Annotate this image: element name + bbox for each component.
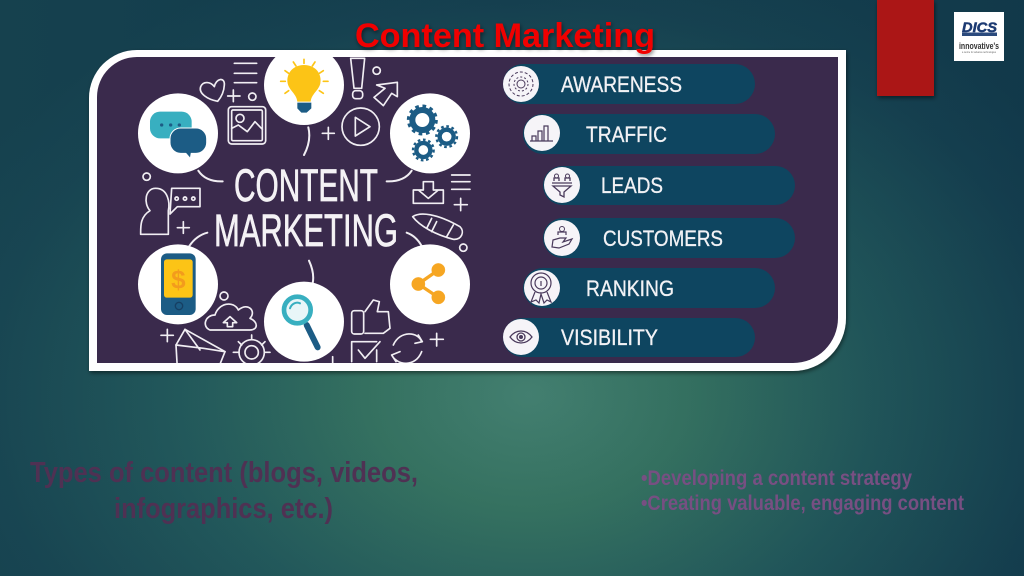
illustration heading: CONTENT MARKETING [214,160,398,256]
panel: content marketing image [89,45,846,371]
heart [200,80,224,101]
download tray [413,182,443,203]
thumbs up [352,311,364,334]
item: leads [543,166,795,205]
check box and refresh [352,342,377,362]
connector lines [189,127,422,283]
arrow [374,82,397,106]
bullet list: content strategy [641,467,964,515]
item: ranking [523,268,775,308]
icon: chat bubbles [150,112,207,157]
item: leads: LEADS [601,173,663,198]
pencil [413,214,462,239]
logo: DICS and innovative's: innovative's [959,41,999,51]
text block: types of content: infographics, etc.) [114,493,333,525]
item: traffic: TRAFFIC [586,122,667,147]
image frame [228,107,266,144]
item: traffic [523,114,775,154]
item: ranking: RANKING [586,276,674,301]
line icons [141,58,470,368]
icon: phone with dollar: $ [171,264,186,294]
plus envelope gear [161,329,173,342]
bullet list: content strategy: •Developing a content strategy [641,467,912,490]
bullet list: content strategy: •Creating valuable, engaging content [641,492,964,515]
white circles [138,45,470,362]
exclamation [351,58,365,88]
icon: gears [408,106,457,160]
illustration heading: CONTENT MARKETING: CONTENT [234,160,378,211]
list: marketing goals [503,64,795,357]
item: customers: CUSTOMERS [603,226,723,251]
red accent tab [877,0,934,96]
person with chat [143,173,150,180]
text block: types of content [30,457,418,525]
item: awareness: AWARENESS [561,72,682,97]
logo: DICS and innovative's [954,12,1004,61]
icon: light bulb [281,59,328,113]
icon: magnifier [284,297,318,347]
item: visibility: VISIBILITY [561,325,658,350]
item: visibility [503,318,755,357]
illustration heading: CONTENT MARKETING: MARKETING [214,205,398,256]
menu lines and plus [228,63,257,102]
item: customers [543,218,795,258]
item: awareness [503,64,755,104]
text block: types of content: Types of content (blogs, videos, [30,457,418,489]
logo: DICS and innovative's: DICS [962,19,998,35]
cloud [220,292,228,300]
logo: DICS and innovative's: a centre for advance technologies [962,50,996,54]
play [342,108,379,145]
title: Content Marketing [355,17,655,55]
illustration: content marketing wheel [138,45,470,368]
icon: share [412,263,445,304]
icon: phone with dollar [161,253,196,315]
